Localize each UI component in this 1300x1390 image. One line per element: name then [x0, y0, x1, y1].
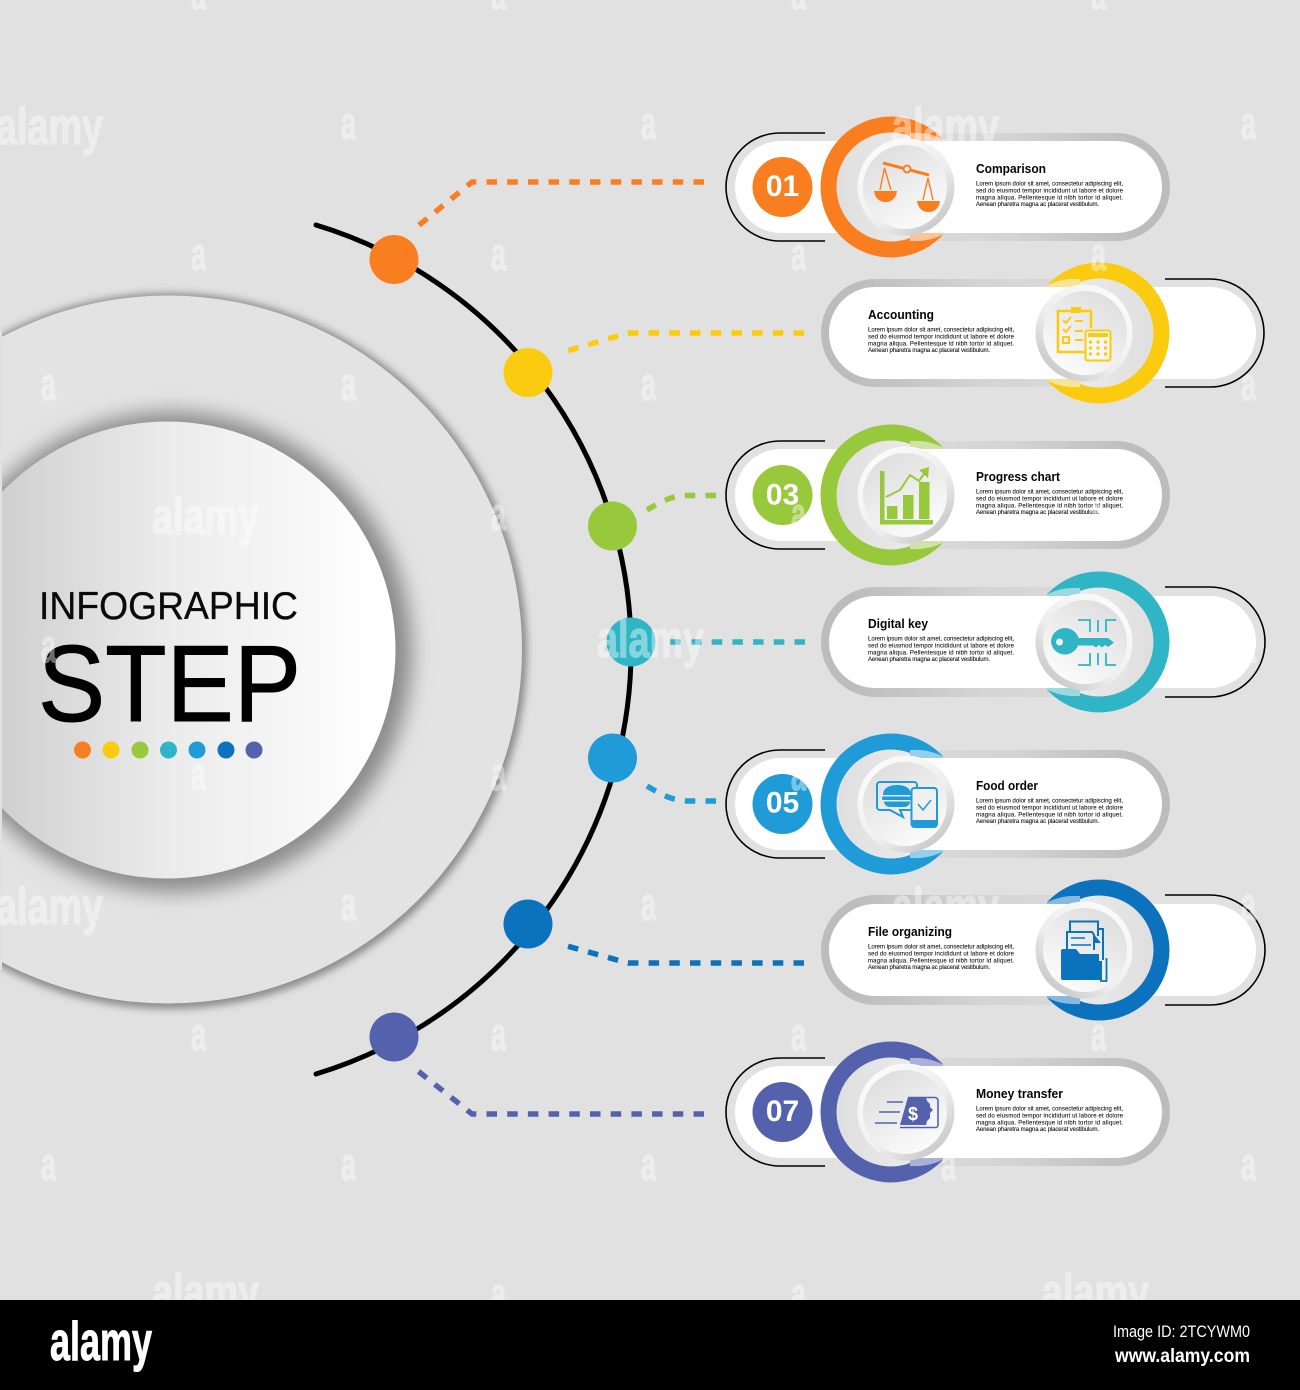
- title: infographic: INFOGRAPHIC: [39, 585, 298, 628]
- description: [868, 328, 1015, 354]
- description: magna aliqua. Pellentesque id nibh tortor id aliquet.: [868, 650, 1014, 656]
- number badge: [752, 774, 812, 834]
- description: Lorem ipsum dolor sit amet, consectetur adipiscing elit,: [868, 944, 1014, 950]
- watermarks: a: [641, 1138, 656, 1190]
- watermarks: a: [641, 878, 656, 930]
- connector 5: [647, 786, 716, 801]
- watermarks: a: [491, 748, 506, 800]
- central concentric discs: [0, 293, 527, 1009]
- icon: money transfer: [875, 1097, 938, 1128]
- heading: Money transfer: [976, 1086, 1063, 1101]
- watermarks: alamy: [152, 488, 259, 546]
- connector 3: [647, 495, 716, 510]
- description: magna aliqua. Pellentesque id nibh tortor id aliquet.: [976, 196, 1123, 202]
- description: Lorem ipsum dolor sit amet, consectetur adipiscing elit,: [976, 182, 1123, 188]
- panel: step 05 food order: [726, 742, 1170, 866]
- icon: balance scale: [874, 163, 940, 212]
- description: sed do eiusmod tempor incididunt ut labore et dolore: [976, 1114, 1124, 1120]
- number badge: [752, 465, 812, 525]
- watermarks: alamy: [0, 98, 103, 156]
- description: magna aliqua. Pellentesque id nibh tortor id aliquet.: [868, 958, 1014, 964]
- description: Aenean pharetra magna ac placerat vestibulum.: [868, 657, 990, 663]
- connector 4: [668, 639, 805, 645]
- heading: File organizing: [868, 924, 952, 939]
- watermarks: a: [1091, 488, 1106, 540]
- description: [868, 944, 1015, 971]
- heading: Progress chart: [976, 469, 1061, 484]
- watermarks: a: [41, 620, 56, 672]
- description: Aenean pharetra magna ac placerat vestibulum.: [976, 819, 1099, 825]
- watermarks: a: [191, 1008, 206, 1060]
- panel: step 02 accounting: [821, 270, 1264, 396]
- watermarks: a: [341, 1138, 356, 1190]
- watermarks: a: [341, 878, 356, 930]
- outer disc: [0, 293, 527, 1009]
- heading: Comparison: [976, 161, 1046, 176]
- watermarks: alamy: [892, 878, 999, 936]
- description: magna aliqua. Pellentesque id nibh tortor id aliquet.: [976, 1120, 1123, 1126]
- heading: Digital key: [868, 616, 929, 631]
- connector 2: [567, 333, 804, 351]
- watermarks: a: [1241, 358, 1256, 410]
- icon: clipboard and calculator: [1058, 307, 1110, 360]
- watermarks: a: [1241, 1138, 1256, 1190]
- description: Aenean pharetra magna ac placerat vestibulum.: [976, 1127, 1099, 1133]
- watermarks: a: [341, 620, 356, 672]
- watermarks: a: [1241, 878, 1256, 930]
- description: sed do eiusmod tempor incididunt ut labore et dolore: [976, 188, 1124, 194]
- timeline node 6: [504, 900, 552, 948]
- number badge: 07: [766, 1095, 799, 1128]
- description: Aenean pharetra magna ac placerat vestibulum.: [868, 965, 990, 971]
- heading: Food order: [976, 778, 1038, 793]
- watermarks: alamy: [597, 611, 704, 669]
- image id: Image ID: 2TCYWM0: [1113, 1322, 1250, 1341]
- connector 7: [418, 1071, 704, 1114]
- inner white disc: [0, 412, 412, 892]
- watermarks: a: [491, 1268, 506, 1320]
- timeline node 4: [606, 618, 656, 666]
- watermarks: a: [191, 748, 206, 800]
- watermarks: a: [791, 1008, 806, 1060]
- panel: step 06 file organizing: [821, 888, 1265, 1012]
- watermarks: a: [341, 97, 356, 149]
- colour dots row: [74, 742, 262, 758]
- website: www.alamy.com: [1114, 1346, 1250, 1367]
- timeline node 3: [588, 502, 637, 550]
- description: [976, 182, 1124, 208]
- description: Lorem ipsum dolor sit amet, consectetur adipiscing elit,: [976, 490, 1123, 496]
- number badge: 05: [766, 786, 799, 820]
- description: magna aliqua. Pellentesque id nibh tortor id aliquet.: [976, 812, 1123, 818]
- watermarks: a: [641, 97, 656, 149]
- watermarks: a: [641, 358, 656, 410]
- panel: step 04 digital key: [821, 580, 1265, 704]
- description: sed do eiusmod tempor incididunt ut labore et dolore: [868, 334, 1015, 340]
- timeline node 2: [504, 348, 552, 397]
- description: [868, 636, 1015, 663]
- watermarks: a: [1241, 620, 1256, 672]
- watermarks: alamy: [152, 1264, 259, 1322]
- description: [976, 490, 1124, 516]
- timeline arc: [316, 225, 631, 1074]
- panel: step 01 comparison: [726, 124, 1170, 250]
- watermarks: alamy: [892, 98, 999, 156]
- watermarks: a: [491, 488, 506, 540]
- watermarks: a: [1091, 228, 1106, 280]
- footer logo: alamy: [50, 1310, 152, 1372]
- heading: Accounting: [868, 307, 934, 322]
- description: [976, 1106, 1124, 1133]
- watermarks: a: [791, 748, 806, 800]
- description: sed do eiusmod tempor incididunt ut labore et dolore: [868, 644, 1015, 650]
- number badge: 01: [766, 170, 799, 203]
- watermarks: a: [791, 488, 806, 540]
- description: magna aliqua. Pellentesque id nibh tortor id aliquet.: [976, 504, 1123, 510]
- watermarks: alamy: [0, 878, 103, 936]
- description: Aenean pharetra magna ac placerat vestibulum.: [868, 348, 990, 354]
- description: sed do eiusmod tempor incididunt ut labore et dolore: [868, 952, 1015, 958]
- timeline node 1: [370, 235, 418, 284]
- watermarks: a: [791, 228, 806, 280]
- watermarks: a: [491, 228, 506, 280]
- description: Aenean pharetra magna ac placerat vestibulum.: [976, 202, 1099, 208]
- description: Lorem ipsum dolor sit amet, consectetur adipiscing elit,: [868, 636, 1014, 642]
- watermarks: a: [1091, 1008, 1106, 1060]
- panel: step 03 progress chart: [726, 432, 1170, 558]
- watermarks: a: [1241, 97, 1256, 149]
- number badge: [752, 157, 812, 217]
- watermarks: a: [791, 1268, 806, 1320]
- description: Lorem ipsum dolor sit amet, consectetur adipiscing elit,: [976, 1106, 1123, 1112]
- connector 6: [567, 946, 804, 963]
- timeline node 5: [588, 734, 637, 782]
- panel: step 07 money transfer: [726, 1050, 1170, 1174]
- watermarks: a: [191, 228, 206, 280]
- watermarks: a: [491, 1008, 506, 1060]
- description: Lorem ipsum dolor sit amet, consectetur adipiscing elit,: [976, 798, 1123, 804]
- description: [976, 798, 1124, 825]
- connector 1: [418, 182, 704, 226]
- timeline node 7: [370, 1012, 418, 1062]
- description: Aenean pharetra magna ac placerat vestibulum.: [976, 510, 1099, 516]
- watermarks: a: [1091, 748, 1106, 800]
- number badge: 03: [766, 478, 799, 512]
- number badge: [752, 1082, 812, 1142]
- description: sed do eiusmod tempor incididunt ut labore et dolore: [976, 806, 1124, 812]
- footer bar: [0, 1300, 1300, 1390]
- watermarks: a: [41, 1138, 56, 1190]
- title: step: STEP: [38, 623, 301, 745]
- watermarks: a: [41, 358, 56, 410]
- watermarks: a: [941, 1138, 956, 1190]
- watermarks: alamy: [1042, 1264, 1149, 1322]
- description: magna aliqua. Pellentesque id nibh tortor id aliquet.: [868, 342, 1014, 348]
- description: Lorem ipsum dolor sit amet, consectetur adipiscing elit,: [868, 328, 1014, 334]
- description: sed do eiusmod tempor incididunt ut labore et dolore: [976, 496, 1124, 502]
- watermarks: a: [341, 358, 356, 410]
- icon: money transfer: $: [908, 1104, 918, 1124]
- icon: file folder: [1061, 922, 1106, 981]
- icon: progress chart: [880, 467, 933, 524]
- icon: key: [1051, 620, 1116, 665]
- icon: burger chat and phone: [877, 782, 937, 827]
